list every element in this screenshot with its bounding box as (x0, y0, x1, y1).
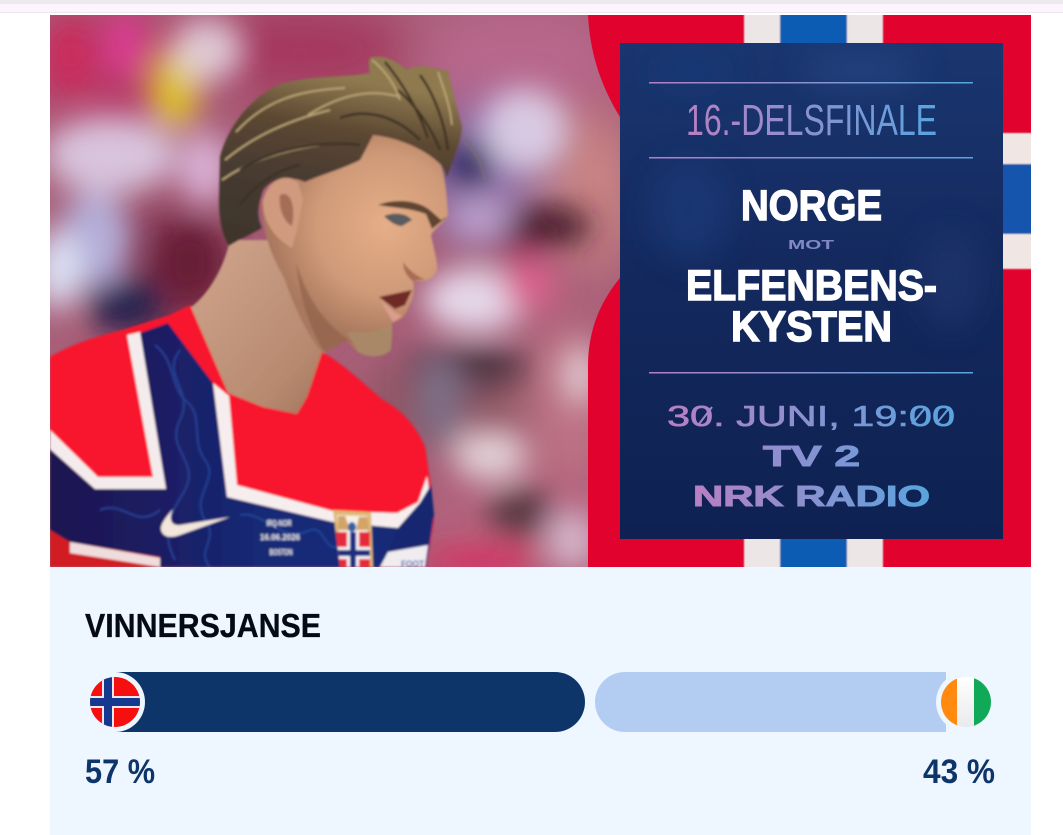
shirt red (50, 305, 434, 567)
beard (348, 328, 392, 356)
team name: Elfenbenskysten: ELFENBENS- (686, 262, 937, 310)
team name: Norge: NORGE (741, 182, 882, 230)
ear (263, 178, 303, 248)
hero image panel (30, 5, 1037, 573)
red flag field with rounded cut-outs (588, 10, 1037, 573)
lower left red panel (50, 530, 160, 567)
tv channel: TV 2 (763, 441, 860, 473)
icon: Norway flag (85, 672, 145, 732)
match info panel (620, 43, 1003, 539)
hair strands (220, 59, 454, 182)
right sleeve blue (391, 487, 435, 550)
hair (219, 57, 462, 246)
team name: Elfenbenskysten: KYSTEN (731, 303, 892, 351)
heading: VINNERSJANSE (85, 607, 321, 644)
bar: Ivory Coast share (595, 672, 946, 732)
nose shadow (403, 262, 425, 281)
percentage: Norway: 57 % (85, 753, 155, 791)
knot pattern on the blue cross (100, 345, 340, 567)
match inscription on shirt (260, 518, 300, 557)
stray hair strand (462, 140, 485, 180)
neck (190, 238, 324, 416)
swoosh logo (161, 509, 230, 537)
sleeve white band (380, 545, 428, 567)
player photo illustration (50, 57, 485, 569)
eyebrow (378, 201, 448, 229)
percentage: Ivory Coast: 43 % (923, 753, 995, 791)
team name: Elfenbenskysten (688, 270, 936, 342)
cheek shadow (296, 267, 348, 352)
win probability panel (50, 567, 1031, 835)
date and time (668, 406, 954, 430)
date and time: 30. JUNI, 19:00 (667, 401, 955, 433)
match inscription on shirt: BOSTON (270, 547, 292, 557)
top browser strip (0, 0, 1063, 13)
match inscription on shirt: 16.06.2026 (260, 532, 300, 542)
head and face (262, 135, 448, 356)
bar: Norway share (115, 672, 585, 732)
white outline left of cross (50, 332, 166, 489)
shirt blue lower area (50, 323, 434, 567)
blurred stadium crowd background (50, 15, 620, 567)
match inscription on shirt: IRQ-NOR (266, 518, 292, 528)
eye (384, 214, 412, 226)
flag stripes: right (1003, 132, 1031, 270)
divider lines (649, 82, 973, 374)
mouth (379, 290, 412, 309)
round heading: 16.-DELSFINALE (686, 96, 937, 145)
team crest (330, 508, 376, 568)
flag stripes: bottom (743, 539, 884, 567)
sleeve sponsor text: FOOT (401, 559, 424, 569)
radio channel: NRK RADIO (693, 481, 930, 513)
versus label: MOT (788, 237, 834, 252)
white outline right of cross (213, 383, 429, 528)
flag stripes: top (743, 15, 884, 43)
icon: Ivory Coast flag (936, 672, 996, 732)
